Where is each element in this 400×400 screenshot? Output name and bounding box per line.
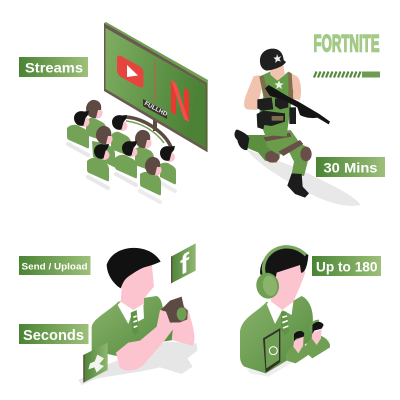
audience person: left black (67, 111, 90, 155)
neck (269, 65, 285, 81)
back boot (234, 129, 249, 150)
label: seconds: Seconds (23, 328, 84, 344)
audience person: back brown (86, 100, 106, 142)
label: 30 Mins (316, 157, 385, 177)
helmet star (273, 54, 281, 63)
helmet (260, 49, 286, 71)
panel: fortnite (234, 30, 385, 206)
panel: send upload (19, 243, 197, 385)
sweater (240, 296, 313, 373)
icon: netflix (171, 80, 189, 122)
knee pad (265, 151, 280, 163)
hair (260, 248, 308, 285)
left arm (116, 308, 175, 371)
thigh (265, 130, 310, 176)
rifle (265, 85, 330, 124)
tie (281, 312, 289, 336)
small person: back (305, 321, 330, 358)
front boot (287, 173, 309, 198)
hair (107, 248, 161, 288)
gear pouch (257, 111, 285, 129)
label: Streams: Streams (25, 60, 83, 76)
camera (161, 297, 188, 323)
label: up to 180: Up to 180 (316, 258, 378, 274)
monitor (104, 22, 208, 152)
label: Streams (19, 57, 88, 77)
tablet: share (83, 343, 108, 383)
right forearm (172, 302, 194, 346)
gloves (257, 97, 273, 111)
panel: up to 180 (240, 247, 381, 377)
neck and face (114, 263, 154, 312)
phone (263, 328, 280, 373)
badge: full hd: FULLHD (143, 101, 169, 118)
shadow (247, 149, 361, 206)
audience person: mid brown (92, 126, 116, 168)
camera person illustration (78, 243, 197, 385)
audience person: front right brown (140, 157, 162, 202)
collar (267, 301, 293, 324)
panel: streams (19, 22, 208, 202)
tablet: facebook: f (180, 247, 189, 282)
chest star (274, 80, 284, 89)
divider line (154, 61, 156, 102)
small person: front (287, 330, 308, 363)
label: send upload (19, 256, 90, 275)
monitor frame (104, 23, 207, 152)
sweater (92, 296, 173, 357)
back leg (246, 135, 280, 163)
collar (118, 302, 144, 324)
label: 30 Mins: 30 Mins (324, 160, 378, 176)
icon: youtube (117, 56, 144, 88)
shadow (78, 342, 197, 385)
audience person: rear right brown (135, 130, 154, 172)
audience person: far right black (159, 146, 176, 191)
audience person: front left black (87, 144, 110, 188)
headset person illustration (240, 247, 331, 377)
tie (131, 310, 139, 335)
label: send upload: Send / Upload (22, 262, 88, 272)
shadow (245, 333, 331, 377)
monitor screen (106, 28, 206, 148)
headphones (254, 247, 306, 300)
torso (258, 72, 293, 137)
label: seconds (19, 324, 88, 344)
audience person: front center black (115, 141, 138, 185)
monitor stand (125, 117, 171, 147)
hip strap (278, 140, 303, 156)
audience person: center black (111, 115, 131, 157)
front knee (300, 147, 312, 161)
progress bar (314, 72, 380, 78)
face and neck (270, 258, 305, 312)
soldier illustration (234, 49, 361, 206)
arms (244, 75, 263, 110)
tablet: facebook (171, 243, 196, 283)
